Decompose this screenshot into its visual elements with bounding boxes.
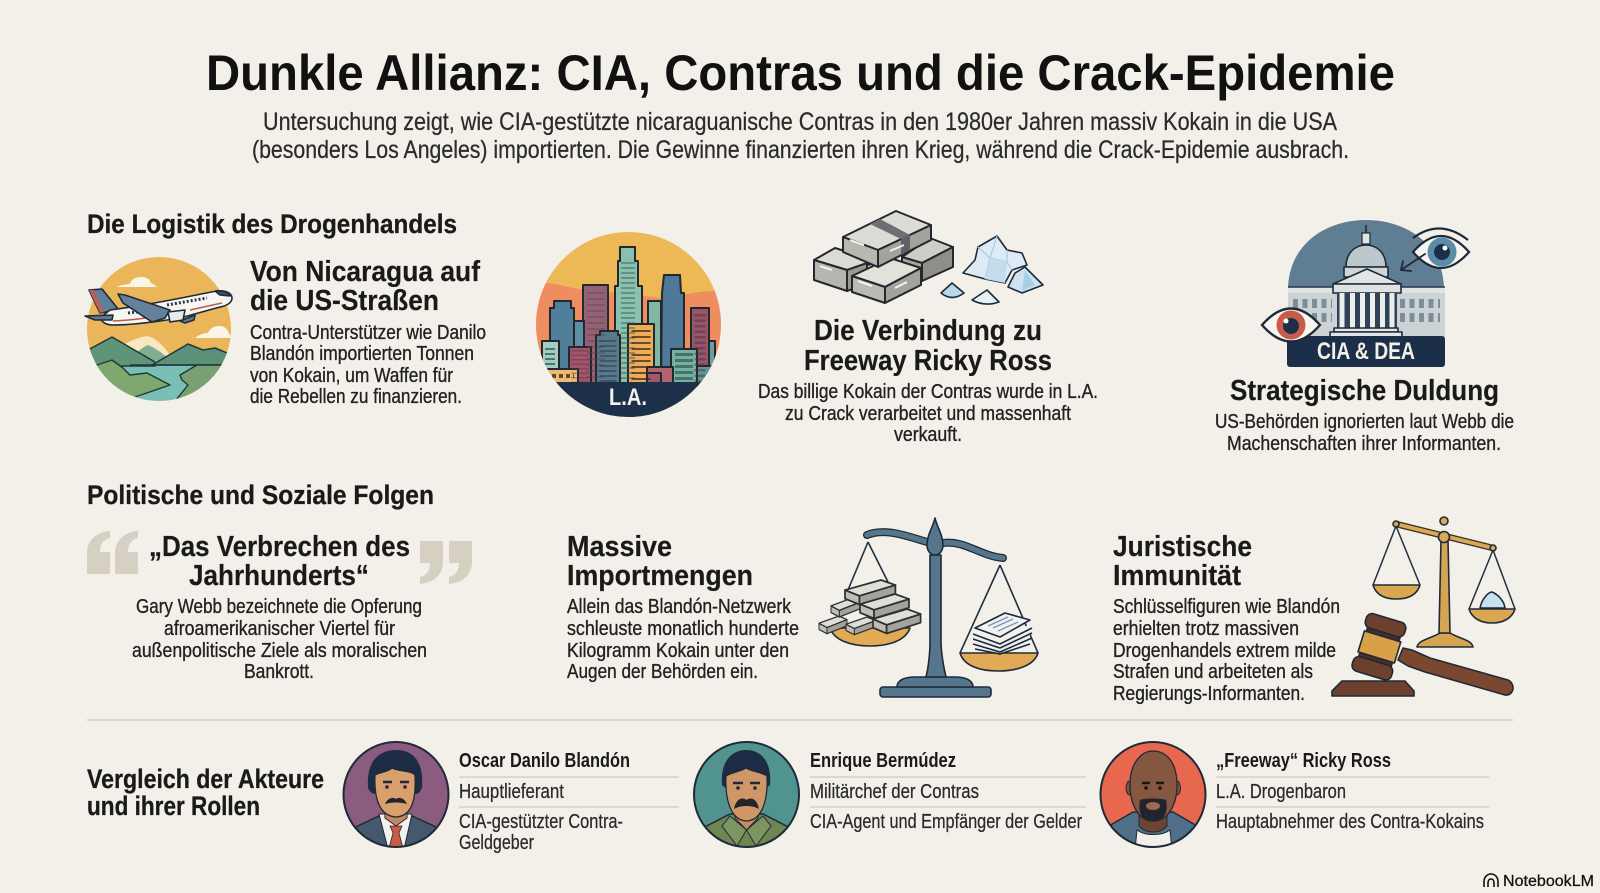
panel: Freeway Ricky Ross — [758, 211, 1098, 446]
divider — [87, 719, 1513, 721]
panel: Das Verbrechen des Jahrhunderts — [87, 531, 472, 683]
name and roles — [1216, 749, 1489, 833]
actor: Enrique Bermúdez — [694, 742, 1086, 850]
icon: golden scale and gavel — [1332, 517, 1515, 696]
body text: verkauft. — [894, 423, 962, 446]
heading: Die Verbindung zu — [814, 315, 1042, 347]
body text — [132, 595, 427, 683]
heading — [87, 764, 324, 821]
icon: L.A. skyline: L.A. — [609, 384, 647, 411]
logo: NotebookLM: NotebookLM — [1503, 873, 1594, 890]
icon: L.A. skyline — [535, 231, 725, 420]
heading: Vergleich der Akteure — [87, 764, 324, 794]
body text: Strafen und arbeiteten als — [1113, 660, 1313, 683]
heading: Jahrhunderts“ — [189, 560, 369, 592]
body text — [1113, 595, 1340, 705]
body text: Augen der Behörden ein. — [567, 660, 758, 683]
actor: Oscar Danilo Blandón — [344, 742, 679, 854]
body text: Kilogramm Kokain unter den — [567, 639, 789, 662]
icon: plane over mountains — [85, 256, 234, 405]
body text: Blandón importierten Tonnen — [250, 342, 474, 365]
heading: „Das Verbrechen des — [149, 531, 410, 563]
heading: Immunität — [1113, 560, 1241, 592]
subtitle: Untersuchung zeigt, wie CIA-gestützte nicaraguanische Contras in den 1980er Jahren massiv Kokain in die USA — [263, 108, 1337, 136]
section heading: Folgen: Politische und Soziale Folgen — [87, 480, 434, 510]
heading: Juristische — [1113, 531, 1252, 563]
icon: closing quote mark — [420, 541, 472, 584]
heading — [149, 531, 410, 592]
body text: Machenschaften ihrer Informanten. — [1227, 432, 1501, 455]
panel: Vergleich der Akteure — [87, 742, 1489, 854]
subtitle — [252, 108, 1349, 164]
portrait: Ross — [1100, 742, 1206, 850]
heading — [1113, 531, 1252, 592]
body text: die Rebellen zu finanzieren. — [250, 385, 462, 408]
icon: opening quote mark — [87, 531, 138, 574]
body text: afroamerikanischer Viertel für — [164, 617, 395, 640]
body text — [1215, 410, 1514, 455]
subtitle: (besonders Los Angeles) importierten. Die Gewinne finanzierten ihren Krieg, während die Crack-Epidemie ausbrach. — [252, 136, 1349, 164]
name and roles: Hauptabnehmer des Contra-Kokains — [1216, 811, 1484, 833]
section heading: Logistik: Die Logistik des Drogenhandels — [87, 209, 457, 239]
name and roles: L.A. Drogenbaron — [1216, 781, 1346, 803]
body text: erhielten trotz massiven — [1113, 617, 1299, 640]
portrait: Blandón — [344, 742, 448, 850]
portrait: Bermúdez — [694, 742, 799, 850]
body text — [250, 321, 486, 408]
name and roles: Oscar Danilo Blandón — [459, 749, 630, 772]
body text: Allein das Blandón-Netzwerk — [567, 595, 792, 618]
body text: Drogenhandels extrem milde — [1113, 639, 1336, 662]
heading: Von Nicaragua auf — [250, 256, 480, 288]
actor: Freeway Ricky Ross — [1100, 742, 1489, 850]
heading: und ihrer Rollen — [87, 791, 260, 821]
title: Dunkle Allianz: CIA, Contras und die Crack-Epidemie — [206, 45, 1395, 101]
heading: Strategische Duldung — [1230, 375, 1499, 407]
name and roles: „Freeway“ Ricky Ross — [1216, 749, 1391, 772]
icon: cocaine bricks and crystals — [814, 211, 1043, 304]
body text: außenpolitische Ziele als moralischen — [132, 639, 427, 662]
body text — [567, 595, 799, 683]
icon: capitol with eyes and CIA & DEA banner — [1262, 220, 1469, 367]
icon: scale with bricks and papers — [819, 518, 1038, 697]
body text: Schlüsselfiguren wie Blandón — [1113, 595, 1340, 618]
name and roles — [810, 749, 1086, 833]
body text: Regierungs-Informanten. — [1113, 682, 1305, 705]
icon: capitol with eyes and CIA & DEA banner: CIA & DEA — [1317, 338, 1415, 365]
name and roles: Hauptlieferant — [459, 781, 564, 803]
heading: die US-Straßen — [250, 285, 439, 317]
body text: von Kokain, um Waffen für — [250, 364, 453, 387]
body text — [758, 380, 1098, 446]
body text: schleuste monatlich hunderte — [567, 617, 799, 640]
body text: Bankrott. — [244, 660, 314, 683]
name and roles: Militärchef der Contras — [810, 781, 979, 803]
panel: Von Nicaragua — [85, 256, 486, 408]
panel: Massive Importmengen — [567, 518, 1038, 697]
body text: Gary Webb bezeichnete die Opferung — [136, 595, 422, 618]
heading: Importmengen — [567, 560, 753, 592]
name and roles — [459, 749, 679, 854]
heading — [804, 315, 1052, 377]
name and roles: CIA-Agent und Empfänger der Gelder — [810, 811, 1082, 833]
body text: zu Crack verarbeitet und massenhaft — [785, 402, 1071, 425]
body text: Contra-Unterstützer wie Danilo — [250, 321, 486, 344]
body text: US-Behörden ignorierten laut Webb die — [1215, 410, 1514, 433]
heading — [567, 531, 753, 592]
heading: Freeway Ricky Ross — [804, 345, 1052, 377]
heading — [250, 256, 480, 317]
panel: Strategische Duldung — [1215, 220, 1514, 455]
name and roles: Geldgeber — [459, 832, 534, 854]
heading: Massive — [567, 531, 672, 563]
body text: Das billige Kokain der Contras wurde in L.A. — [758, 380, 1098, 403]
name and roles: Enrique Bermúdez — [810, 749, 956, 772]
panel: Juristische Immunität — [1113, 517, 1515, 705]
name and roles: CIA-gestützter Contra- — [459, 811, 623, 833]
